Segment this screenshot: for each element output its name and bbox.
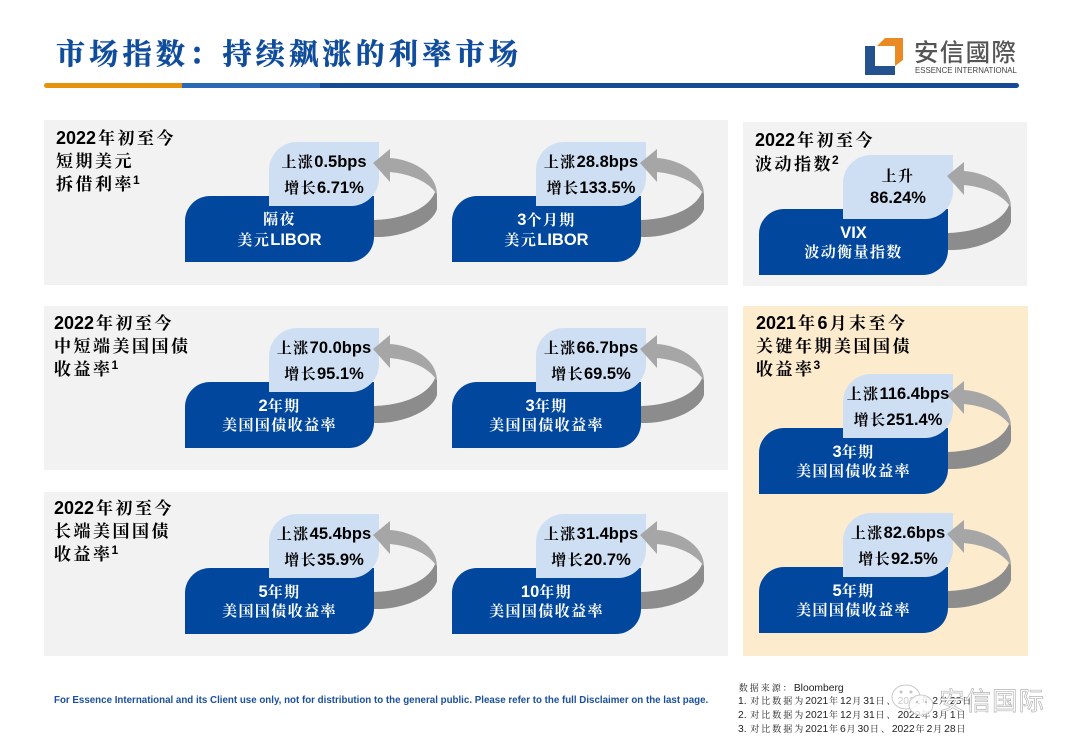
panel: short-term LIBOR <box>44 120 728 285</box>
text: 上涨28.8bps <box>544 153 638 171</box>
text: 2. 对比数据为2021年12月31日、2022年3月1日 <box>738 710 967 721</box>
card: 2-year treasury: 美国国债收益率 <box>222 417 337 434</box>
source notes <box>738 683 973 735</box>
text: 上涨66.7bps <box>544 339 638 357</box>
text: 增长6.71% <box>284 179 364 197</box>
card: 5-year treasury: 5年期 <box>258 583 300 601</box>
text: 上涨82.6bps <box>851 524 945 542</box>
text: 增长20.7% <box>551 551 631 569</box>
icon: logo mark <box>865 38 903 75</box>
card: 3-year treasury since June 2021: 美国国债收益率 <box>796 463 911 480</box>
card: VIX <box>759 155 1011 275</box>
text: 上涨45.4bps <box>277 525 371 543</box>
card: overnight LIBOR: 隔夜 <box>263 211 296 228</box>
icon: chat bubbles <box>892 684 934 716</box>
heading: key tenor treasuries <box>756 313 912 379</box>
heading: key tenor treasuries: 收益率3 <box>756 358 820 379</box>
card: 5-year treasury since June 2021 <box>759 513 1011 633</box>
card: 5-year treasury since June 2021: 美国国债收益率 <box>796 602 911 619</box>
card: 2-year treasury: 2年期 <box>258 397 300 415</box>
heading: short and mid-term treasuries: 收益率1 <box>54 358 118 379</box>
text: 上涨0.5bps <box>281 153 367 171</box>
card: 2-year treasury <box>185 328 437 448</box>
text: 86.24% <box>870 189 926 207</box>
card: 3-month LIBOR: 美元LIBOR <box>504 231 589 249</box>
card: 10-year treasury: 美国国债收益率 <box>489 603 604 620</box>
card: VIX: 波动衡量指数 <box>804 244 903 261</box>
text: 增长92.5% <box>858 550 938 568</box>
panel: long-term treasuries <box>44 492 728 656</box>
card: 3-month LIBOR: 3个月期 <box>517 211 576 229</box>
card: 3-year treasury: 3年期 <box>526 397 568 415</box>
card: 3-month LIBOR <box>452 142 704 262</box>
card: 5-year treasury since June 2021: 5年期 <box>832 582 874 600</box>
logo <box>865 34 1017 75</box>
watermark text: 安信国际 <box>939 681 1045 718</box>
text: 增长133.5% <box>547 179 635 197</box>
panel: short and mid-term treasuries <box>44 306 728 470</box>
card: overnight LIBOR <box>185 142 437 262</box>
text: 增长69.5% <box>551 365 631 383</box>
card: 5-year treasury <box>185 514 437 634</box>
card: 3-year treasury since June 2021: 3年期 <box>832 443 874 461</box>
heading: short and mid-term treasuries: 2022年初至今 <box>54 313 174 333</box>
disclaimer: For Essence International and its Client use only, not for distribution to the general public. Please refer to the full Disclaimer on the last page. <box>54 695 708 706</box>
text: 上涨70.0bps <box>277 339 371 357</box>
text: 1. 对比数据为2021年12月31日、2022年2月28日 <box>738 696 973 707</box>
heading: short-term LIBOR: 短期美元 <box>56 152 134 171</box>
heading: key tenor treasuries: 关键年期美国国债 <box>756 337 912 356</box>
heading: key tenor treasuries: 2021年6月末至今 <box>756 313 908 333</box>
card: 3-year treasury: 美国国债收益率 <box>489 417 604 434</box>
heading: short and mid-term treasuries <box>54 313 190 379</box>
header divider <box>44 83 1019 88</box>
text: 上涨116.4bps <box>847 385 949 403</box>
heading: short-term LIBOR: 拆借利率1 <box>56 173 140 194</box>
heading: volatility index: 波动指数2 <box>755 153 839 174</box>
title: 市场指数：持续飙涨的利率市场 <box>56 32 522 73</box>
heading: volatility index: 2022年初至今 <box>755 130 875 150</box>
text: 3. 对比数据为2021年6月30日、2022年2月28日 <box>738 724 967 735</box>
text: 增长95.1% <box>284 365 364 383</box>
heading: long-term treasuries: 2022年初至今 <box>54 498 174 518</box>
heading: long-term treasuries <box>54 498 174 564</box>
card: 10-year treasury: 10年期 <box>521 583 572 601</box>
heading: volatility index <box>755 130 875 174</box>
heading: short-term LIBOR <box>56 128 176 194</box>
watermark <box>892 681 1045 718</box>
card: overnight LIBOR: 美元LIBOR <box>237 231 322 249</box>
panel: volatility index <box>743 122 1027 286</box>
text: 增长251.4% <box>854 411 942 429</box>
card: 3-year treasury since June 2021 <box>759 374 1011 494</box>
text: 上升 <box>882 168 914 185</box>
card: VIX: VIX <box>840 224 867 242</box>
text: 数据来源：Bloomberg <box>739 683 844 694</box>
text: 上涨31.4bps <box>544 525 638 543</box>
heading: short and mid-term treasuries: 中短端美国国债 <box>54 337 190 356</box>
card: 3-year treasury <box>452 328 704 448</box>
heading: long-term treasuries: 收益率1 <box>54 543 118 564</box>
logo wordmark: ESSENCE INTERNATIONAL <box>915 66 1017 75</box>
card: 10-year treasury <box>452 514 704 634</box>
card: 5-year treasury: 美国国债收益率 <box>222 603 337 620</box>
heading: long-term treasuries: 长端美国国债 <box>54 522 171 541</box>
logo wordmark: 安信國際 <box>914 34 1017 69</box>
panel: key tenor treasuries <box>743 306 1028 656</box>
text: 增长35.9% <box>284 551 364 569</box>
heading: short-term LIBOR: 2022年初至今 <box>56 128 176 148</box>
